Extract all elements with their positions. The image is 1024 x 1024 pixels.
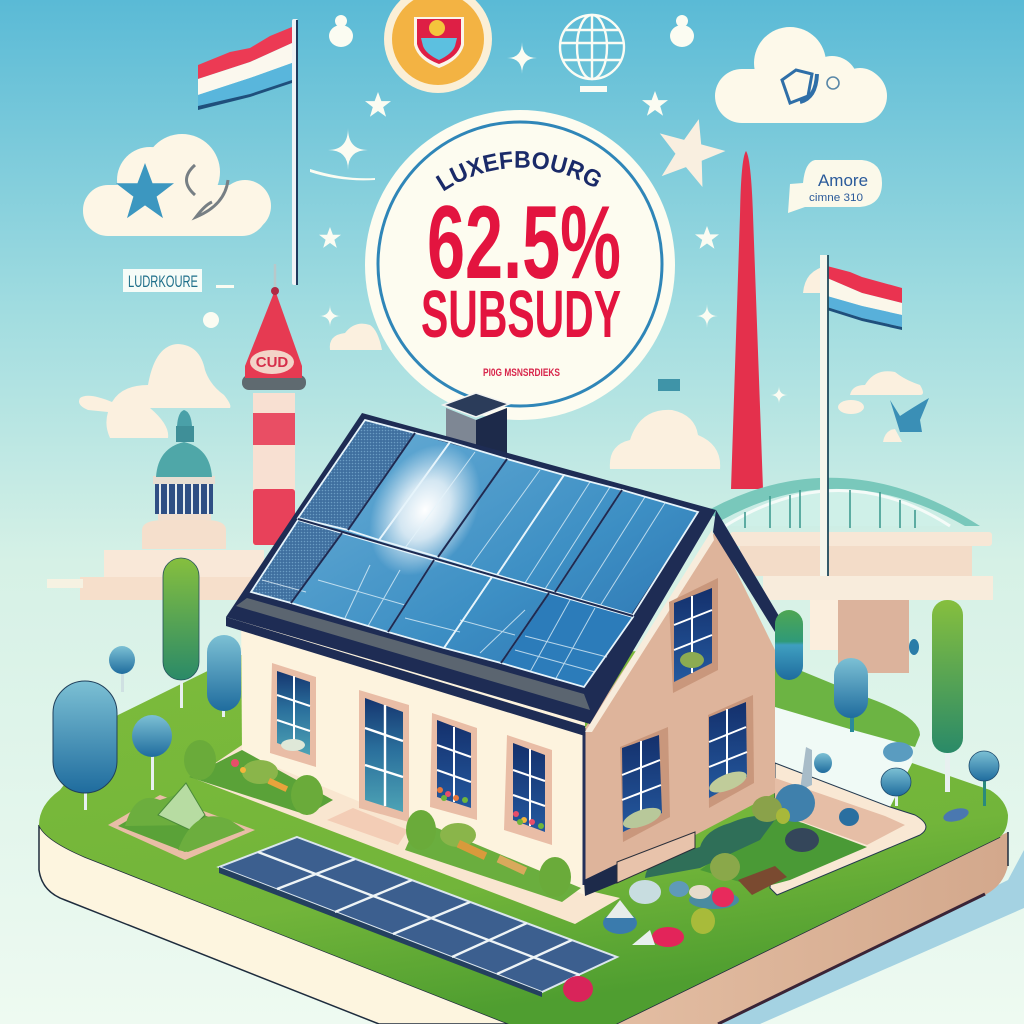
- label: city tag: [123, 269, 202, 292]
- landmark: bridge and decks: [705, 478, 993, 673]
- house: front wall: [241, 605, 585, 895]
- small blue sign: [658, 379, 680, 391]
- garden stones and berries: [563, 796, 819, 1002]
- cloud: top right with logo: [715, 27, 887, 123]
- window: front 1: [270, 663, 316, 767]
- hedge: front left flowerbed: [184, 740, 333, 815]
- subsidy label: SUBSUDY: [421, 277, 621, 352]
- main badge: 62.5% subsidy: [365, 110, 675, 420]
- icon: globe: [560, 15, 624, 92]
- hedge: front right flowerbed: [405, 810, 581, 902]
- landmark: red spire: [731, 151, 763, 489]
- chimney: [443, 393, 509, 455]
- speech bubble: [788, 160, 882, 213]
- window: gable lower left: [620, 727, 670, 842]
- rooftop solar array: [251, 420, 698, 687]
- speech bubble: Amore: [818, 171, 868, 190]
- ground solar panel: [219, 837, 617, 997]
- door with glazing: [359, 690, 409, 822]
- label: city tag: LUDRKOURE: [128, 272, 198, 291]
- subsidy percentage: 62.5%: [427, 185, 621, 301]
- house: gable wall: [585, 530, 775, 893]
- trees: left group: [53, 558, 241, 810]
- flag: right: [820, 255, 902, 576]
- island base: cream side: [39, 825, 620, 1024]
- emblem: crest on orange sun: [384, 0, 492, 93]
- landmark: platforms: [47, 550, 264, 600]
- cloud: left with blue star: [83, 134, 271, 236]
- small caption: PI0G MSNSRDIEKS: [483, 367, 560, 379]
- white road: [775, 707, 913, 807]
- house: corner trim and plinth: [584, 728, 695, 896]
- path: cream walkway: [193, 745, 926, 924]
- landmark: red and white tower: [242, 264, 306, 545]
- window: gable upper: [669, 578, 718, 693]
- window: gable lower right: [706, 695, 754, 808]
- planter: front left with sign: [108, 783, 255, 860]
- speech bubble: cimne 310: [809, 192, 863, 204]
- trees: right group: [775, 600, 999, 826]
- decorative stars: [203, 15, 788, 404]
- window: front 2: [430, 713, 477, 820]
- clouds: background beige: [79, 266, 923, 469]
- lawn patch behind road: [775, 660, 920, 747]
- landmark: domed building: [142, 410, 226, 549]
- badge title: LUXEFBOURG: [436, 151, 601, 192]
- island lawn: [39, 650, 1008, 1024]
- landmark: red and white tower: CUD: [256, 354, 288, 371]
- island shadow: [715, 850, 1024, 1024]
- flag: top left: [198, 19, 298, 285]
- window: front 3: [504, 735, 552, 845]
- bird shape: [890, 398, 929, 432]
- roof: [226, 413, 798, 736]
- island base: tan side: [616, 832, 1008, 1024]
- doorstep: [327, 808, 408, 845]
